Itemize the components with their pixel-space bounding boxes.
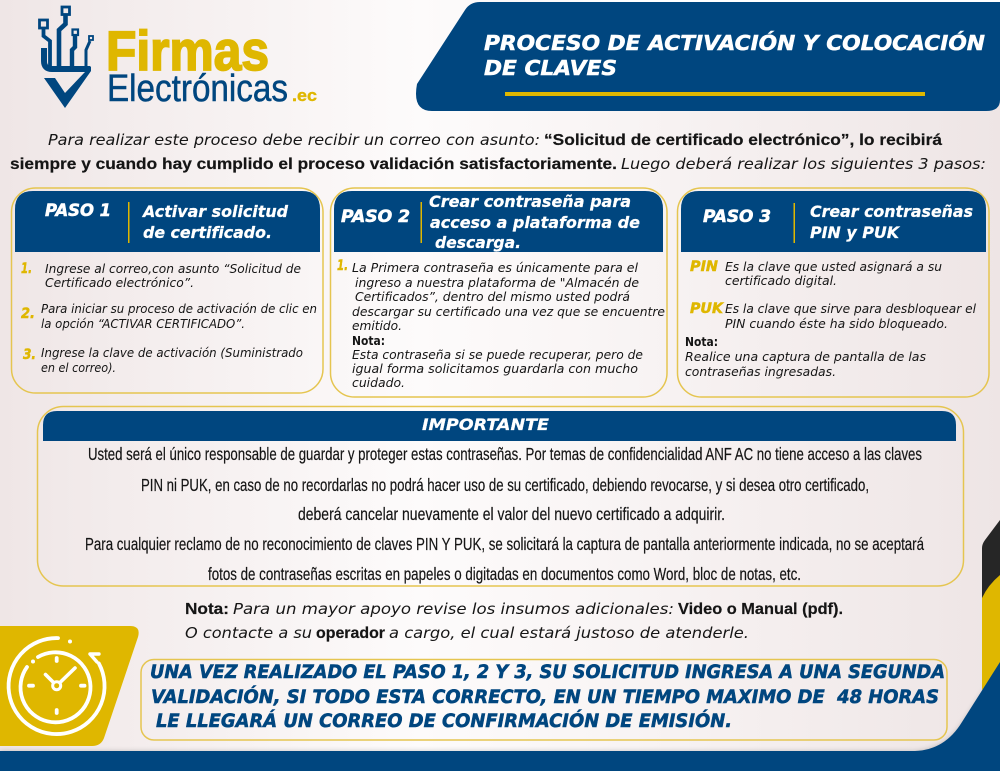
text: paso 3: PUK: [690, 301, 724, 317]
text: importante: [85, 444, 924, 584]
badge: clock: [0, 626, 139, 746]
text: paso 2: Certificados”, dentro del mismo usted podrá: [355, 290, 630, 304]
step list: paso 1: la opción “ACTIVAR CERTIFICADO”.: [41, 317, 245, 331]
text: paso 2: igual forma solicitamos guardarla con mucho: [352, 362, 638, 376]
title text: DE CLAVES: [484, 56, 617, 80]
logo word: Electrónicas: Electrónicas: [107, 68, 288, 110]
text: paso 3: certificado digital.: [725, 274, 837, 288]
note text: [185, 600, 843, 642]
icon: clock with arrow: [4, 633, 109, 739]
intro paragraph: Luego deberá realizar los siguientes 3 pasos:: [621, 155, 986, 173]
corner ribbons and bottom bar: [0, 520, 1000, 771]
intro paragraph: “Solicitud de certificado electrónico”, lo recibirá: [544, 132, 942, 149]
heading: importante: [43, 411, 956, 441]
icon: circuit pencil: [40, 7, 93, 108]
header: paso 1: [15, 191, 320, 252]
header: paso 3: Crear contraseñas: [810, 202, 973, 221]
text: importante: fotos de contraseñas escritas en papeles o digitadas en documentos como Word, bloc de notas, etc.: [208, 564, 801, 584]
callout: validation message: UNA VEZ REALIZADO EL PASO 1, 2 Y 3, SU SOLICITUD INGRESA A UNA SEGUNDA: [150, 662, 945, 683]
text: paso 2: Nota:: [352, 334, 385, 348]
text: paso 3: Realice una captura de pantalla de las: [685, 350, 927, 364]
text: paso 3: PIN cuando éste ha sido bloqueado.: [725, 317, 948, 331]
text: paso 3: Nota:: [685, 335, 718, 349]
text: paso 2: 1.: [337, 258, 348, 274]
callout: validation message: VALIDACIÓN, SI TODO ESTA CORRECTO, EN UN TIEMPO MAXIMO DE 48 HORAS: [151, 686, 939, 708]
title banner: [416, 2, 1000, 111]
note text: Para un mayor apoyo revise los insumos adicionales:: [233, 600, 674, 618]
step list: paso 1: Certificado electrónico”.: [45, 276, 194, 290]
header: paso 2: PASO 2: [341, 207, 410, 227]
heading: importante: IMPORTANTE: [422, 415, 549, 434]
text: importante: deberá cancelar nuevamente el valor del nuevo certificado a adquirir.: [298, 504, 725, 524]
text: paso 3: PIN: [690, 259, 718, 275]
callout: validation message: [141, 660, 947, 740]
logo word: Firmas: Firmas: [106, 19, 269, 82]
text: paso 2: Esta contraseña si se puede recuperar, pero de: [352, 348, 643, 362]
header: paso 1: de certificado.: [143, 223, 272, 242]
text: paso 2: La Primera contraseña es únicamente para el: [352, 261, 639, 275]
title text: [484, 31, 985, 80]
header: paso 3: PIN y PUK: [810, 223, 901, 242]
step list: paso 1: [21, 261, 317, 375]
text: paso 2: descargar su certificado una vez que se encuentre: [352, 305, 665, 319]
intro paragraph: siempre y cuando hay cumplido el proceso validación satisfactoriamente.: [10, 156, 617, 173]
note text: Nota:: [185, 601, 229, 618]
title text: PROCESO DE ACTIVACIÓN Y COLOCACIÓN: [484, 31, 985, 55]
step list: paso 1: Para iniciar su proceso de activación de clic en: [41, 302, 317, 316]
intro paragraph: Para realizar este proceso debe recibir un correo con asunto:: [48, 131, 540, 149]
panel: paso 3: [678, 188, 989, 397]
text: paso 2: emitido.: [352, 319, 402, 333]
header: paso 3: PASO 3: [703, 207, 771, 227]
note text: O contacte a su: [185, 624, 312, 642]
step list: paso 1: Ingrese al correo,con asunto “Solicitud de: [45, 262, 301, 276]
text: paso 2: cuidado.: [352, 376, 405, 390]
text: paso 3: contraseñas ingresadas.: [685, 365, 836, 379]
header: paso 2: Crear contraseña para: [429, 192, 631, 211]
header: paso 1: PASO 1: [45, 201, 111, 221]
panel: importante: [38, 406, 964, 586]
header: paso 2: [334, 191, 663, 252]
step list: paso 1: 3.: [23, 347, 36, 363]
callout: validation message: LE LLEGARÁ UN CORREO DE CONFIRMACIÓN DE EMISIÓN.: [156, 710, 732, 732]
logo word: .ec: .ec: [292, 86, 317, 105]
panel: paso 2: [330, 188, 667, 397]
step list: paso 1: 2.: [21, 306, 35, 322]
text: paso 3: Es la clave que usted asignará a su: [725, 260, 942, 274]
note text: a cargo, el cual estará justoso de atenderle.: [389, 624, 749, 642]
step list: paso 1: Ingrese la clave de activación (Suministrado: [41, 346, 303, 360]
note text: Video o Manual (pdf).: [678, 601, 843, 618]
header: paso 2: descarga.: [435, 233, 521, 252]
intro paragraph: [10, 131, 986, 173]
header: paso 3: [681, 191, 986, 252]
note text: operador: [316, 625, 385, 642]
header: paso 1: Activar solicitud: [141, 202, 289, 221]
step list: paso 1: en el correo).: [41, 361, 116, 375]
panel: paso 1: [12, 188, 323, 393]
text: paso 3: Es la clave que sirve para desbloquear el: [725, 302, 977, 316]
text: paso 3: [685, 259, 977, 379]
step list: paso 1: 1.: [21, 261, 32, 277]
text: paso 2: [337, 258, 665, 390]
header: paso 2: acceso a plataforma de: [430, 213, 640, 232]
text: paso 2: ingreso a nuestra plataforma de "Almacén de: [355, 276, 639, 290]
logo: Firmas Electrónicas: [40, 7, 317, 110]
